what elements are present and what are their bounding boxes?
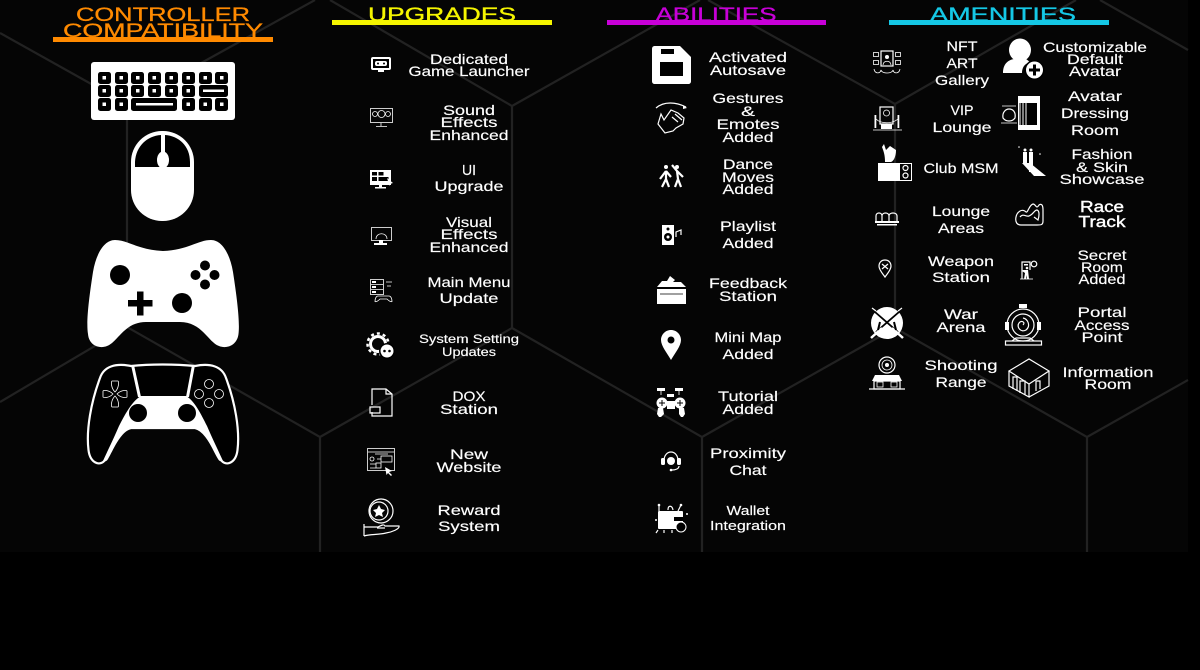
- label: sound effects enhanced: Effects: [440, 114, 498, 130]
- label: race track: Race: [1080, 199, 1124, 216]
- label: dox station: Station: [440, 401, 498, 417]
- icon: mouse: [131, 131, 194, 221]
- icon: keyboard: [91, 62, 235, 120]
- panel: abilities: [607, 5, 826, 533]
- label: secret room added: [1078, 247, 1127, 287]
- label: customizable default avatar: Customizable: [1043, 39, 1147, 55]
- label: dance moves added: [722, 156, 774, 197]
- icon: game launcher monitor: [371, 57, 391, 72]
- label: gestures and emotes added: Added: [722, 129, 774, 145]
- label: new website: [436, 446, 502, 475]
- label: weapon station: [928, 253, 994, 285]
- label: secret room added: Added: [1078, 271, 1126, 287]
- heading: controller compatibility: CONTROLLER: [76, 5, 250, 26]
- icon: lounge seats: [875, 213, 899, 226]
- label: weapon station: Station: [932, 269, 990, 285]
- label: gestures and emotes added: [712, 90, 784, 145]
- heading: abilities: [607, 5, 826, 26]
- label: war arena: War: [944, 306, 978, 322]
- icon: dual-sense controller: [88, 364, 238, 463]
- icon: avatar dressing room: [1001, 96, 1040, 130]
- heading: upgrades: [332, 5, 552, 26]
- label: visual effects enhanced: Visual: [446, 214, 492, 230]
- label: playlist added: Playlist: [720, 218, 776, 234]
- label: proximity chat: [710, 445, 786, 478]
- label: system setting updates: System Setting: [419, 332, 519, 346]
- label: main menu update: Main Menu: [428, 274, 510, 290]
- label: tutorial added: Added: [722, 401, 774, 417]
- label: dance moves added: Dance: [723, 156, 773, 172]
- label: war arena: [936, 306, 986, 335]
- label: vip lounge: [932, 102, 992, 135]
- panel: amenities: [869, 5, 1154, 397]
- icon: weapon station pin: [879, 260, 891, 277]
- label: nft art gallery: ART: [946, 55, 978, 71]
- label: lounge areas: Areas: [938, 220, 984, 236]
- label: reward system: [438, 502, 500, 534]
- icon: dancers: [660, 165, 683, 187]
- label: portal access point: Portal: [1078, 304, 1126, 320]
- label: mini map added: Mini Map: [714, 329, 782, 345]
- label: new website: New: [450, 446, 489, 462]
- label: fashion and skin showcase: & Skin: [1076, 159, 1128, 175]
- label: dance moves added: Added: [722, 181, 774, 197]
- icon: tutorial controller: [656, 388, 686, 417]
- label: tutorial added: Tutorial: [718, 388, 778, 404]
- label: dance moves added: Moves: [722, 169, 774, 185]
- label: customizable default avatar: Avatar: [1069, 63, 1121, 79]
- heading: abilities: ABILITIES: [656, 5, 776, 26]
- icon: vip lounge: [873, 107, 902, 130]
- label: activated autosave: Activated: [709, 49, 787, 65]
- heading: amenities: AMENITIES: [930, 5, 1076, 26]
- label: war arena: Arena: [936, 319, 986, 335]
- label: race track: [1078, 199, 1126, 231]
- icon: shooting range building: [869, 357, 905, 389]
- label: reward system: Reward: [438, 502, 500, 518]
- panel: upgrades: [332, 5, 552, 536]
- label: lounge areas: Lounge: [932, 203, 990, 219]
- label: system setting updates: [419, 332, 519, 359]
- icon: information room box: [1009, 359, 1049, 397]
- label: wallet integration: Wallet: [726, 504, 770, 518]
- icon: dox document: [370, 389, 392, 416]
- icon: nft art gallery: [874, 51, 900, 73]
- label: dedicated game launcher: Dedicated: [430, 51, 508, 67]
- label: shooting range: Shooting: [924, 357, 998, 373]
- label: fashion and skin showcase: [1060, 146, 1145, 187]
- label: shooting range: [924, 357, 998, 390]
- label: ui upgrade: [434, 162, 504, 194]
- label: nft art gallery: [935, 38, 989, 88]
- icon: customizable avatar plus: [1003, 38, 1044, 80]
- label: avatar dressing room: Room: [1071, 122, 1119, 138]
- icon: save floppy disk: [652, 46, 691, 84]
- label: ui upgrade: Upgrade: [434, 178, 504, 194]
- label: portal access point: Point: [1082, 329, 1123, 345]
- icon: feedback box: [657, 276, 686, 304]
- label: race track: Track: [1078, 214, 1126, 231]
- icon: system settings gear: [368, 334, 395, 359]
- label: club msm: Club MSM: [924, 160, 998, 176]
- label: feedback station: [709, 275, 788, 304]
- label: fashion and skin showcase: Fashion: [1072, 146, 1132, 162]
- icon: wallet integration: [655, 504, 688, 533]
- heading: controller compatibility: COMPATIBILITY: [63, 21, 263, 42]
- label: vip lounge: VIP: [950, 102, 974, 118]
- label: proximity chat: Chat: [730, 462, 767, 478]
- label: activated autosave: [709, 49, 787, 78]
- label: nft art gallery: NFT: [946, 38, 978, 54]
- label: avatar dressing room: Avatar: [1068, 88, 1122, 104]
- icon: website: [368, 448, 394, 476]
- label: avatar dressing room: [1061, 88, 1129, 138]
- icon: secret room: [1020, 261, 1037, 279]
- label: dox station: [440, 388, 498, 417]
- label: information room: Room: [1084, 376, 1132, 392]
- icon: gamepad: [87, 240, 239, 347]
- label: lounge areas: [932, 203, 990, 236]
- label: sound effects enhanced: [430, 102, 508, 143]
- label: portal access point: [1074, 304, 1130, 345]
- label: ui upgrade: UI: [462, 162, 476, 179]
- heading: controller compatibility: [53, 5, 273, 42]
- label: visual effects enhanced: [430, 214, 508, 255]
- label: visual effects enhanced: Effects: [440, 226, 498, 242]
- icon: reward coin and hand: [364, 499, 399, 536]
- label: gestures and emotes added: Gestures: [712, 90, 784, 106]
- label: secret room added: Secret: [1078, 247, 1127, 263]
- heading: amenities: [889, 5, 1109, 26]
- label: shooting range: Range: [936, 374, 987, 390]
- label: secret room added: Room: [1081, 259, 1123, 275]
- label: system setting updates: Updates: [442, 345, 496, 359]
- label: information room: Information: [1062, 364, 1154, 380]
- label: information room: [1062, 364, 1154, 392]
- label: sound effects enhanced: Enhanced: [430, 127, 508, 143]
- label: gestures and emotes added: Emotes: [716, 116, 780, 132]
- icon: speaker with music note: [662, 225, 681, 245]
- label: playlist added: [720, 218, 776, 251]
- label: wallet integration: Integration: [710, 519, 786, 533]
- label: reward system: System: [438, 518, 500, 534]
- label: customizable default avatar: Default: [1067, 51, 1123, 67]
- label: feedback station: Feedback: [709, 275, 788, 291]
- label: dox station: DOX: [452, 388, 486, 404]
- label: main menu update: Update: [440, 290, 499, 306]
- label: dedicated game launcher: Game Launcher: [408, 63, 530, 79]
- icon: race track: [1016, 204, 1043, 225]
- label: tutorial added: [718, 388, 778, 417]
- label: mini map added: [714, 329, 782, 362]
- label: sound effects enhanced: Sound: [443, 102, 495, 118]
- label: portal access point: Access: [1074, 317, 1130, 333]
- icon: fashion showcase: [1018, 146, 1046, 176]
- icon: sound monitor: [370, 108, 392, 126]
- icon: club dj booth: [878, 144, 912, 181]
- label: main menu update: [428, 274, 510, 306]
- icon: main menu: [370, 280, 392, 302]
- label: visual effects enhanced: Enhanced: [430, 239, 508, 255]
- label: customizable default avatar: [1043, 39, 1147, 79]
- icon: visual monitor: [372, 228, 392, 245]
- icon: war arena crossed rifles: [871, 307, 903, 339]
- icon: waving hand: [656, 103, 687, 133]
- icon: map pin: [661, 330, 681, 360]
- label: weapon station: Weapon: [928, 253, 994, 269]
- label: dedicated game launcher: [408, 51, 530, 79]
- label: avatar dressing room: Dressing: [1061, 105, 1129, 121]
- label: proximity chat: Proximity: [710, 445, 786, 461]
- icon: portal access point: [1005, 304, 1042, 345]
- label: mini map added: Added: [722, 346, 774, 362]
- panel: controller compatibility: [53, 5, 273, 463]
- label: playlist added: Added: [722, 235, 774, 251]
- icon: ui monitor: [370, 170, 393, 188]
- label: nft art gallery: Gallery: [935, 72, 989, 88]
- label: feedback station: Station: [719, 288, 777, 304]
- label: activated autosave: Autosave: [710, 62, 786, 78]
- label: gestures and emotes added: &: [741, 103, 756, 119]
- icon: headset: [661, 452, 681, 471]
- label: vip lounge: Lounge: [932, 119, 992, 135]
- label: new website: Website: [436, 459, 502, 475]
- label: wallet integration: [710, 504, 786, 533]
- heading: upgrades: UPGRADES: [368, 5, 516, 26]
- label: fashion and skin showcase: Showcase: [1060, 171, 1145, 187]
